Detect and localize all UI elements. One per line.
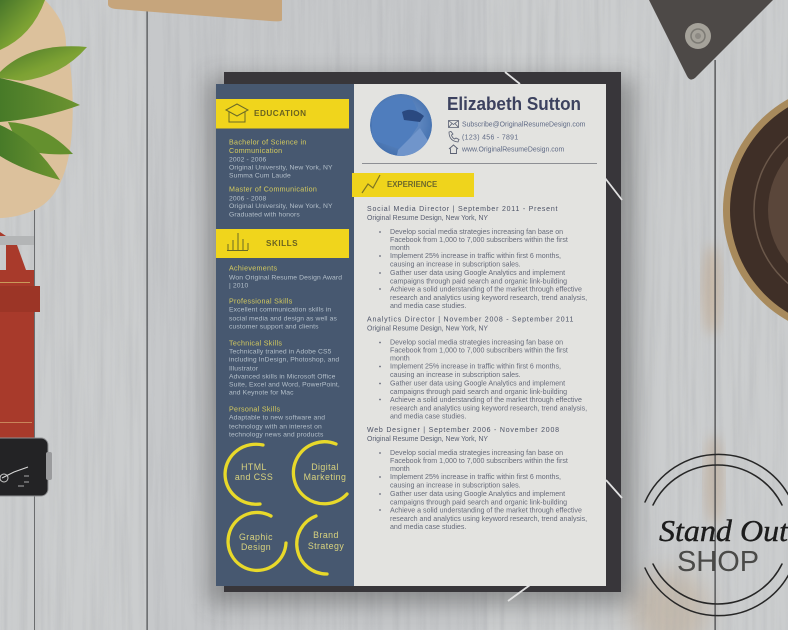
text block: education details: Summa Cum Laude: [229, 172, 291, 180]
bullet list: Develop social media strategies increasing fan base on: [390, 449, 563, 457]
elastic band corners: [505, 72, 622, 601]
text block: skills details: Personal Skills: [229, 406, 280, 414]
text block: education details: Original University, New York, NY: [229, 203, 333, 210]
bullet list: causing an increase in subscription sales.: [390, 371, 521, 379]
bullet list: [379, 338, 587, 420]
contact details: (123) 456 - 7891: [462, 134, 519, 142]
bullet list: causing an increase in subscription sales.: [390, 482, 521, 490]
chart: Digital Marketing skill ring: [293, 442, 347, 504]
chart: Brand Strategy skill ring: Strategy: [308, 541, 344, 551]
chart: HTML and CSS skill ring: and CSS: [235, 472, 273, 482]
job: Analytics Director: [367, 316, 587, 420]
profile photo: [370, 94, 434, 160]
text block: skills details: [229, 264, 342, 438]
chart: HTML and CSS skill ring: [225, 444, 273, 504]
divider: [362, 163, 597, 164]
bullet list: Facebook from 1,000 to 7,000 subscribers within the first: [390, 457, 568, 465]
text block: skills details: Suite, Excel and Word, PowerPoint,: [229, 382, 340, 388]
job: Social Media Director: [367, 206, 587, 310]
text block: education details: Master of Communication: [229, 186, 317, 194]
chart: Graphic Design skill ring: [228, 512, 286, 570]
resume paper: [352, 84, 606, 586]
text block: skills details: customer support and clients: [229, 324, 319, 330]
bullet list: Develop social media strategies increasing fan base on: [390, 228, 563, 236]
panel: main content: [352, 94, 597, 531]
text block: skills details: Adaptable to new software and: [229, 414, 325, 422]
bullet list: Implement 25% increase in traffic within first 6 months,: [390, 362, 561, 370]
bullet list: [379, 228, 587, 310]
bullet list: month: [390, 465, 410, 473]
text block: skills details: Illustrator: [229, 366, 259, 372]
text block: skills details: social media and design as well as: [229, 316, 338, 322]
icon: phone: [449, 132, 459, 142]
red leather watch strap: [0, 232, 40, 440]
bullet list: and media case studies.: [390, 302, 466, 310]
text block: skills details: and Keynote for Mac: [229, 390, 294, 396]
icon: house: [449, 145, 458, 154]
text block: skills details: Advanced skills in Microsoft Office: [229, 374, 336, 380]
contact details: www.OriginalResumeDesign.com: [461, 146, 565, 154]
bullet list: research and analytics using keyword research, trend analysis,: [390, 515, 587, 523]
bullet list: research and analytics using keyword research, trend analysis,: [390, 404, 587, 412]
chart: Graphic Design skill ring: Design: [241, 542, 271, 552]
bullet list: and media case studies.: [390, 523, 466, 531]
text block: education details: Graduated with honors: [229, 212, 300, 218]
text block: skills details: Professional Skills: [229, 298, 293, 306]
round wooden table: [723, 83, 788, 337]
job: Analytics Director: Original Resume Design, New York, NY: [367, 326, 488, 332]
bullet list: Implement 25% increase in traffic within first 6 months,: [390, 473, 561, 481]
bullet list: Achieve a solid understanding of the market through effective: [390, 286, 582, 294]
bullet list: research and analytics using keyword research, trend analysis,: [390, 294, 587, 302]
chart: Graphic Design skill ring: Graphic: [239, 532, 273, 542]
text block: skills details: Won Original Resume Design Award: [229, 274, 342, 282]
heading: skills: SKILLS: [266, 239, 298, 248]
wood bowl: [0, 0, 73, 218]
bullet list: campaigns through paid search and organic link-building: [390, 388, 567, 396]
chart: Brand Strategy skill ring: [297, 516, 344, 574]
contact details: [448, 120, 586, 154]
heading: education: EDUCATION: [254, 109, 307, 118]
bullet list: causing an increase in subscription sales.: [390, 260, 521, 268]
bullet list: campaigns through paid search and organic link-building: [390, 498, 567, 506]
heading: experience: [352, 173, 474, 197]
chart: HTML and CSS skill ring: HTML: [241, 462, 267, 472]
plant leaves: [0, 0, 87, 180]
text block: skills details: Technical Skills: [229, 340, 282, 348]
text block: skills details: Technically trained in Adobe CS5: [229, 348, 332, 356]
bullet list: Achieve a solid understanding of the market through effective: [390, 506, 582, 514]
contact details: Subscribe@OriginalResumeDesign.com: [462, 122, 586, 128]
logo: Stand Out Shop: Stand Out: [659, 513, 788, 548]
heading: skills: [216, 229, 349, 258]
bullet list: month: [390, 244, 410, 252]
logo: Stand Out Shop: [645, 454, 788, 616]
bullet list: and media case studies.: [390, 412, 466, 420]
text block: skills details: including InDesign, Photoshop, and: [229, 356, 339, 364]
name heading: Elizabeth Sutton: [447, 94, 581, 114]
text block: education details: Original University, New York, NY: [229, 164, 333, 172]
chart: Digital Marketing skill ring: Marketing: [304, 472, 346, 482]
folder shadow: [208, 78, 634, 604]
smart watch: [0, 438, 52, 496]
bullet list: Gather user data using Google Analytics and implement: [390, 380, 565, 388]
bullet list: Develop social media strategies increasing fan base on: [390, 338, 563, 346]
text block: education details: 2002 - 2006: [229, 156, 266, 164]
panel: sidebar: [216, 84, 354, 586]
job: Social Media Director: Social Media Director | September 2011 - Present: [367, 206, 558, 213]
gray leather tag with rivet: [649, 0, 773, 80]
wood block at top: [108, 0, 282, 21]
job: Web Designer: Web Designer | September 2006 - November 2008: [367, 427, 560, 434]
text block: education details: Bachelor of Science in: [229, 138, 307, 146]
bullet list: Gather user data using Google Analytics and implement: [390, 269, 565, 277]
logo: Stand Out Shop: SHOP: [677, 546, 759, 578]
bullet list: campaigns through paid search and organic link-building: [390, 278, 567, 286]
job: Social Media Director: Original Resume Design, New York, NY: [367, 215, 488, 222]
dark folder: [224, 72, 621, 592]
bullet list: Gather user data using Google Analytics and implement: [390, 490, 565, 498]
text block: skills details: technology with an interest on: [229, 424, 322, 430]
heading: education: [216, 99, 349, 128]
job: Analytics Director: Analytics Director | November 2008 - September 2011: [367, 316, 574, 324]
icon: envelope: [448, 120, 458, 128]
text block: education details: [229, 138, 333, 218]
bullet list: Achieve a solid understanding of the market through effective: [390, 396, 582, 404]
text block: education details: Communication: [229, 147, 282, 155]
bullet list: Facebook from 1,000 to 7,000 subscribers within the first: [390, 236, 568, 244]
chart: Brand Strategy skill ring: Brand: [313, 530, 339, 540]
text block: skills details: Excellent communication skills in: [229, 306, 331, 314]
bullet list: Facebook from 1,000 to 7,000 subscribers within the first: [390, 346, 568, 354]
bullet list: Implement 25% increase in traffic within first 6 months,: [390, 252, 561, 260]
chart: Digital Marketing skill ring: Digital: [311, 462, 339, 472]
heading: experience: EXPERIENCE: [387, 180, 437, 189]
bullet list: [379, 449, 587, 531]
job: Web Designer: [367, 427, 587, 531]
bullet list: month: [390, 354, 410, 362]
text block: education details: 2006 - 2008: [229, 196, 266, 202]
text block: skills details: Achievements: [229, 264, 278, 272]
job: Web Designer: Original Resume Design, New York, NY: [367, 436, 488, 443]
text block: skills details: technology news and products: [229, 432, 324, 438]
text block: skills details: | 2010: [229, 282, 248, 290]
